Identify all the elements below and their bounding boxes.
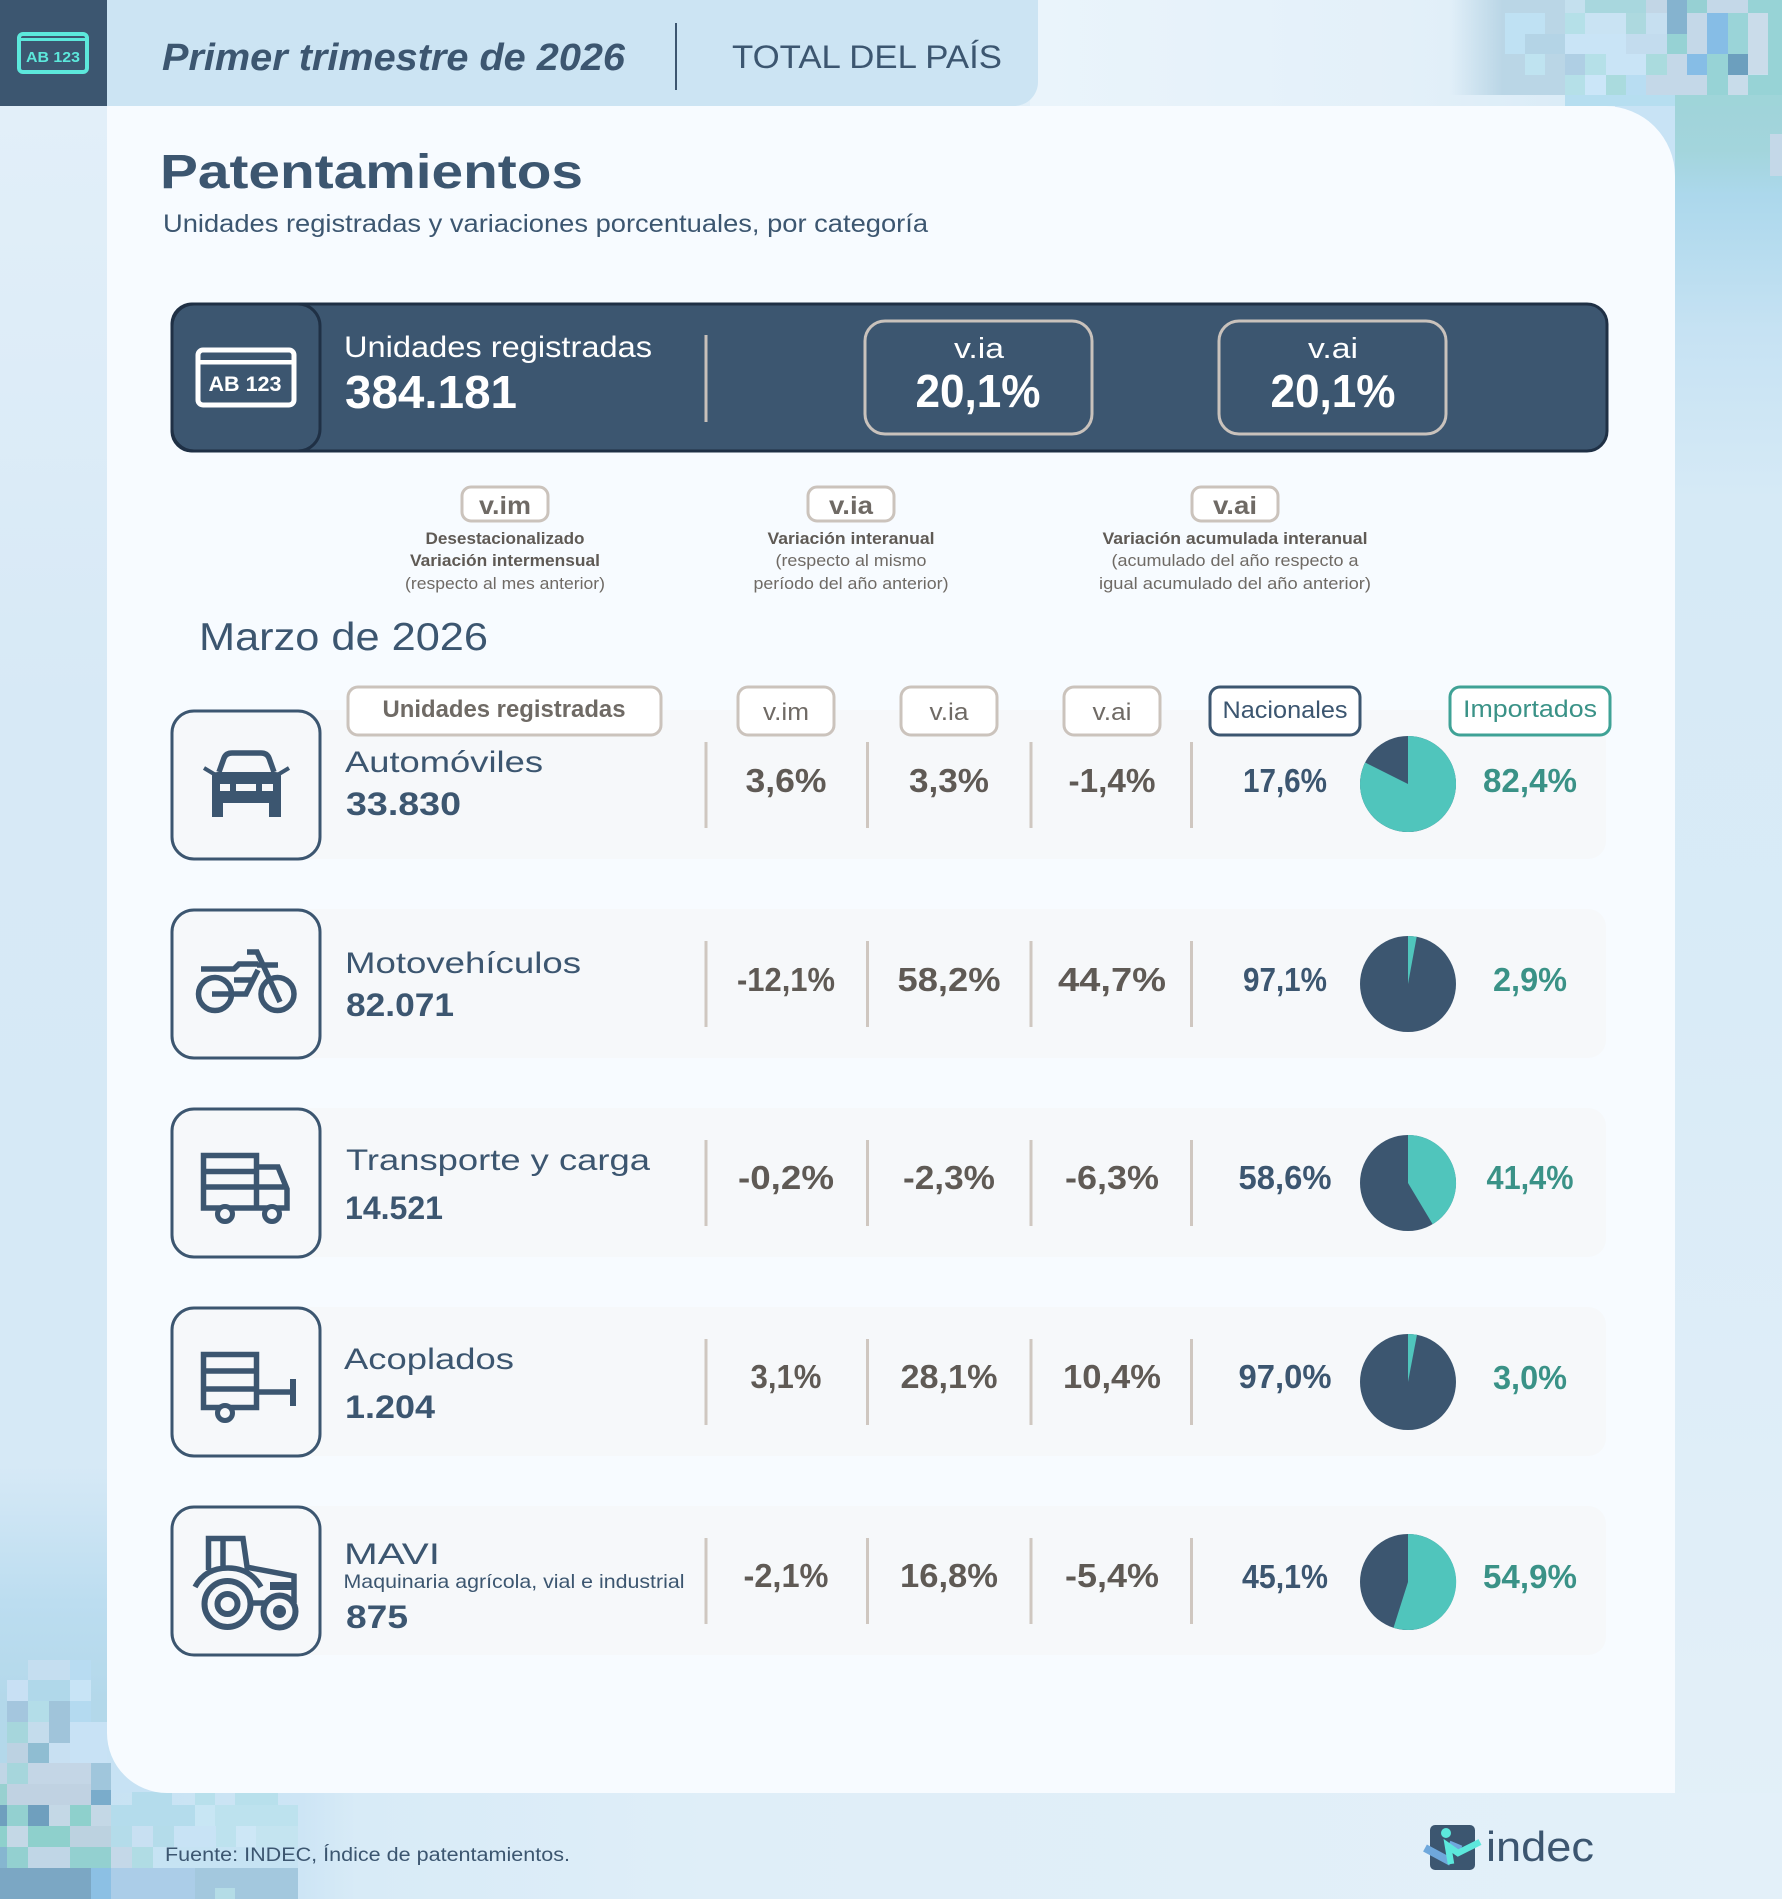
legend: v.im: Desestacionalizado (426, 530, 584, 548)
nacionales value: 17,6% (1243, 762, 1327, 799)
row: Acoplados (172, 1307, 1606, 1456)
column header: v.im: v.im (763, 699, 809, 726)
legend: v.im: (respecto al mes anterior) (405, 575, 605, 593)
section heading: Marzo de 2026 (199, 616, 488, 659)
header bar (0, 0, 1038, 106)
category name: Acoplados (344, 1343, 514, 1376)
category units: 1.204 (345, 1389, 435, 1425)
row: Motovehículos (172, 909, 1606, 1058)
v.ai value: 44,7% (1058, 961, 1166, 998)
pie chart (1360, 1534, 1456, 1630)
v.ia value: -2,3% (903, 1159, 995, 1196)
v.ai value: -6,3% (1065, 1159, 1159, 1196)
nacionales value: 97,0% (1238, 1358, 1332, 1395)
v.ia value: 28,1% (900, 1358, 998, 1395)
legend: v.ia: Variación interanual (768, 530, 934, 548)
icon: truck (204, 1156, 287, 1222)
v.ia value: 3,3% (909, 762, 989, 799)
column header: Importados (1450, 687, 1610, 735)
legend: v.ai (1099, 487, 1371, 593)
importados value: 3,0% (1493, 1359, 1567, 1396)
column header: Unidades registradas: Unidades registradas (382, 696, 626, 723)
row: MAVI (172, 1506, 1606, 1655)
v.im value: -2,1% (744, 1557, 828, 1594)
icon: motorcycle (198, 952, 294, 1010)
v.ai value: 10,4% (1063, 1358, 1161, 1395)
mosaic top right (1505, 13, 1545, 34)
pie chart (1360, 1135, 1456, 1231)
row: Automóviles (172, 710, 1606, 859)
category name: Transporte y carga (346, 1144, 650, 1177)
v.im value: 3,1% (750, 1358, 822, 1395)
category units: 875 (346, 1599, 408, 1635)
legend: v.im (405, 487, 605, 593)
legend: v.ai: v.ai (1213, 492, 1257, 520)
column header: Nacionales: Nacionales (1222, 697, 1348, 724)
pie chart (1360, 936, 1456, 1032)
legend: v.im: v.im (479, 492, 531, 520)
column header: Importados: Importados (1463, 696, 1597, 723)
icon: license plate: AB 123 (208, 373, 282, 396)
v.ia value: 58,2% (898, 961, 1000, 998)
legend: v.ia (754, 487, 948, 593)
legend: v.ai: Variación acumulada interanual (1102, 530, 1368, 548)
category units: 33.830 (346, 786, 461, 822)
v.ia value: 16,8% (900, 1557, 998, 1594)
legend: v.ia: v.ia (829, 492, 874, 520)
column header: v.ia (901, 687, 997, 735)
pie chart (1360, 1334, 1456, 1430)
v.im value: -12,1% (737, 961, 835, 998)
row: Transporte y carga (172, 1108, 1606, 1257)
legend: v.ia: (respecto al mismo (776, 552, 926, 570)
legend: v.im: Variación intermensual (410, 552, 600, 570)
title: Patentamientos (160, 146, 583, 199)
v.ia box: v.ia (954, 333, 1005, 365)
subtitle: Unidades registradas y variaciones porcentuales, por categoría (163, 210, 928, 238)
header icon tile (0, 0, 107, 106)
column header: v.im (738, 687, 834, 735)
importados value: 41,4% (1486, 1159, 1574, 1196)
pie chart (1360, 736, 1456, 832)
mosaic bottom left (28, 1660, 70, 1680)
legend: v.ai: (acumulado del año respecto a (1112, 552, 1359, 570)
v.ai box: v.ai (1308, 333, 1358, 365)
v.ai value: -5,4% (1065, 1557, 1159, 1594)
v.ai box: 20,1% (1270, 365, 1396, 417)
category description: Maquinaria agrícola, vial e industrial (344, 1571, 684, 1593)
logo: indec: indec (1486, 1823, 1594, 1870)
column header: v.ai: v.ai (1092, 699, 1132, 726)
category name: MAVI (344, 1538, 440, 1571)
importados value: 82,4% (1483, 762, 1577, 799)
main card panel (107, 106, 1675, 1793)
v.ai box (1219, 321, 1446, 434)
icon: car (204, 753, 289, 817)
column header: Nacionales (1210, 687, 1360, 735)
column header: v.ia: v.ia (930, 699, 969, 726)
importados value: 54,9% (1483, 1558, 1577, 1595)
total label: Unidades registradas (344, 331, 652, 364)
source note: Fuente: INDEC, Índice de patentamientos. (165, 1845, 570, 1866)
v.im value: -0,2% (738, 1159, 834, 1196)
period heading: Primer trimestre de 2026 (162, 37, 626, 79)
total value: 384.181 (345, 366, 517, 418)
panel: total band (172, 304, 1607, 451)
icon: tractor (195, 1538, 296, 1628)
header strip (107, 0, 1038, 106)
logo: indec (1425, 1823, 1594, 1870)
category units: 14.521 (345, 1190, 443, 1226)
v.ia box: 20,1% (916, 365, 1040, 417)
icon: trailer (204, 1354, 296, 1420)
v.ia box (865, 321, 1092, 434)
v.ai value: -1,4% (1068, 762, 1156, 799)
nacionales value: 58,6% (1238, 1159, 1332, 1196)
v.im value: 3,6% (746, 762, 826, 799)
nacionales value: 97,1% (1243, 961, 1327, 998)
category units: 82.071 (346, 987, 454, 1023)
header icon tile: AB 123 (26, 49, 80, 66)
column header: Unidades registradas (348, 687, 661, 735)
legend: v.ai: igual acumulado del año anterior) (1099, 575, 1371, 593)
nacionales value: 45,1% (1242, 1558, 1328, 1595)
category name: Automóviles (345, 746, 543, 779)
icon: license plate (198, 350, 294, 405)
category name: Motovehículos (345, 947, 581, 980)
region heading: TOTAL DEL PAÍS (732, 39, 1002, 75)
legend: v.ia: período del año anterior) (754, 575, 948, 593)
column header: v.ai (1064, 687, 1160, 735)
importados value: 2,9% (1493, 961, 1567, 998)
